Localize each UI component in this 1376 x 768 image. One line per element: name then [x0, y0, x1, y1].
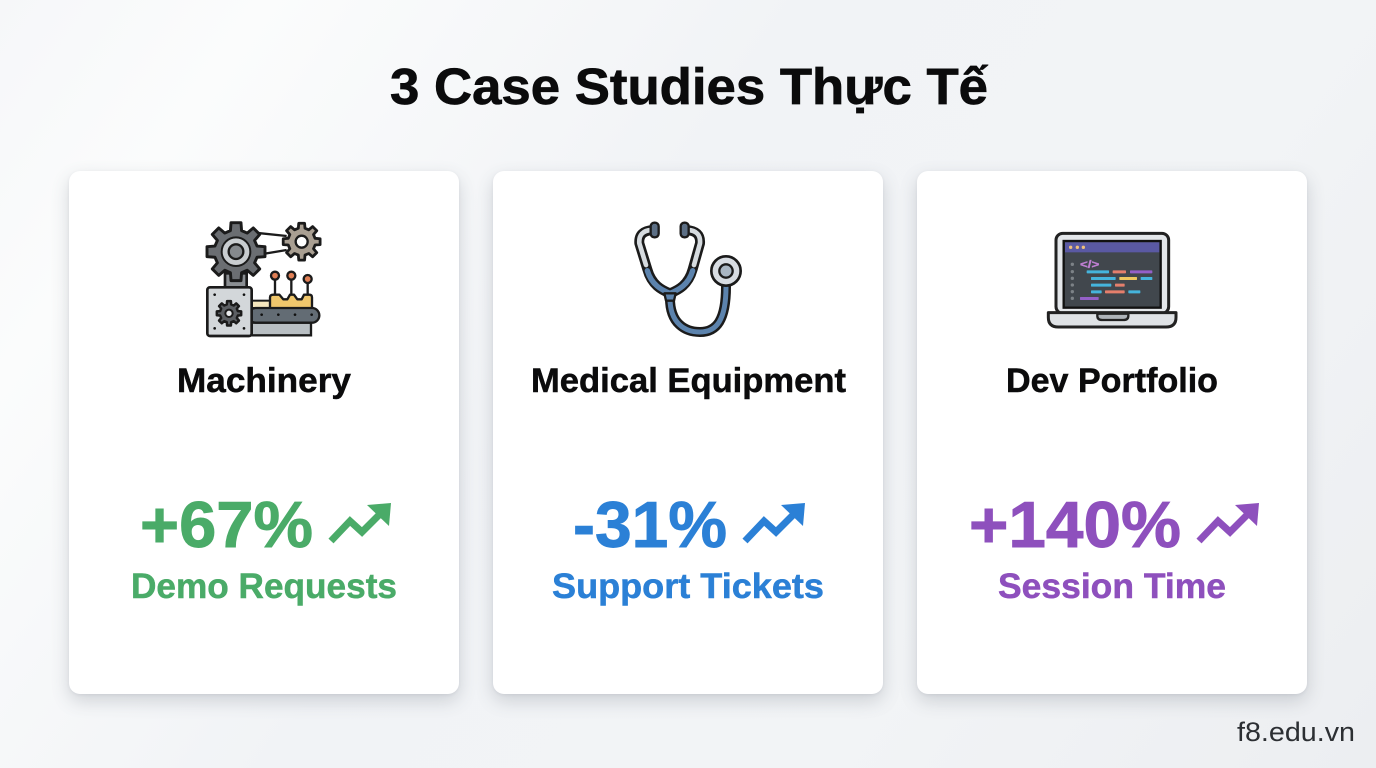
metric: -31%: -31% [573, 488, 727, 561]
watermark: f8.edu.vn [1237, 717, 1355, 747]
icon: trend arrow up [1199, 503, 1259, 541]
icon: trend arrow up [745, 503, 805, 541]
panel: medical equipment case study [493, 171, 883, 694]
label: Support Tickets: Support Tickets [552, 567, 824, 606]
icon: laptop with code: </> [1080, 259, 1099, 271]
heading: Dev Portfolio: Dev Portfolio [1006, 362, 1218, 400]
icon: stethoscope [639, 223, 741, 332]
icon: factory machinery [207, 223, 320, 336]
title: 3 Case Studies Thực Tế [390, 58, 989, 115]
panel: dev portfolio case study [917, 171, 1307, 694]
heading: Medical Equipment: Medical Equipment [531, 362, 846, 400]
heading: Machinery: Machinery [177, 362, 351, 400]
label: Demo Requests: Demo Requests [131, 567, 397, 606]
metric: +140%: +140% [969, 488, 1181, 561]
icon: trend arrow up [331, 503, 391, 541]
label: Session Time: Session Time [998, 567, 1226, 606]
icon: laptop with code [1048, 233, 1176, 327]
panel: machinery case study [69, 171, 459, 694]
metric: +67%: +67% [140, 488, 313, 561]
